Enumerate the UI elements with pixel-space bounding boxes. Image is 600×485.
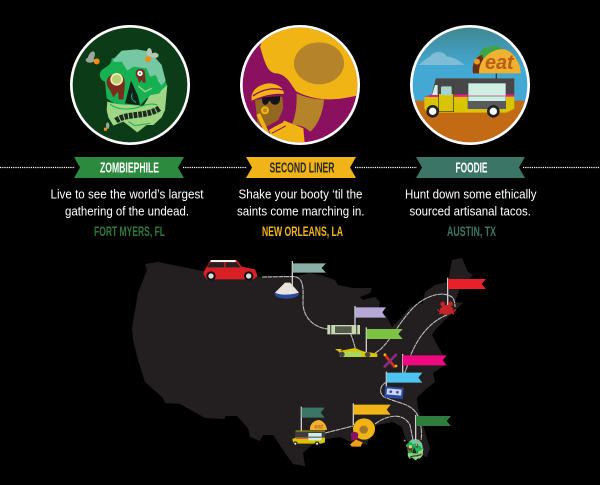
marker: food truck with teal flag (292, 407, 327, 446)
description: foodie: Hunt down some ethically (405, 186, 537, 202)
description: foodie (405, 186, 537, 218)
description: zombiephile: Live to see the world’s largest (50, 186, 204, 202)
banner: zombiephile: ZOMBIEPHILE (100, 160, 159, 176)
marker: food truck with teal flag: eat (314, 425, 324, 431)
marker: UFO with teal flag (275, 261, 326, 299)
marker: race car with green flag (335, 327, 403, 357)
map: United States silhouette (132, 258, 473, 466)
route lines (262, 276, 455, 440)
marker: crossed instruments with pink flag (384, 353, 447, 373)
icon: zombie skull (71, 26, 189, 144)
description: second liner: saints come marching in. (237, 204, 364, 218)
marker: mini car (203, 260, 258, 281)
location: Fort Myers: FORT MYERS, FL (94, 223, 165, 239)
banner: foodie (416, 157, 525, 178)
marker: tuba player with yellow flag (350, 403, 391, 447)
marker: cash with purple flag (327, 306, 386, 334)
icon: taco truck: eat (485, 51, 515, 74)
marker: crab with red flag (437, 278, 486, 315)
description: zombiephile (50, 186, 204, 218)
icon: taco truck (408, 23, 532, 147)
banner: second liner (246, 157, 356, 178)
location: Austin: AUSTIN, TX (447, 223, 496, 239)
description: second liner: Shake your booty ‘til the (238, 186, 362, 202)
panel: zombiephile (50, 26, 204, 239)
banner: foodie: FOODIE (456, 160, 488, 176)
icon: tuba player (240, 25, 360, 145)
panel: second liner (237, 17, 365, 239)
panel: foodie (405, 23, 537, 239)
description: zombiephile: gathering of the undead. (65, 204, 189, 218)
banner: second liner: SECOND LINER (270, 160, 335, 176)
description: second liner (237, 186, 364, 218)
banner: zombiephile (74, 157, 184, 178)
marker: cassette with blue flag (384, 372, 422, 399)
marker: zombie with green flag (404, 415, 451, 460)
description: foodie: sourced artisanal tacos. (410, 204, 531, 218)
location: New Orleans: NEW ORLEANS, LA (262, 223, 343, 239)
